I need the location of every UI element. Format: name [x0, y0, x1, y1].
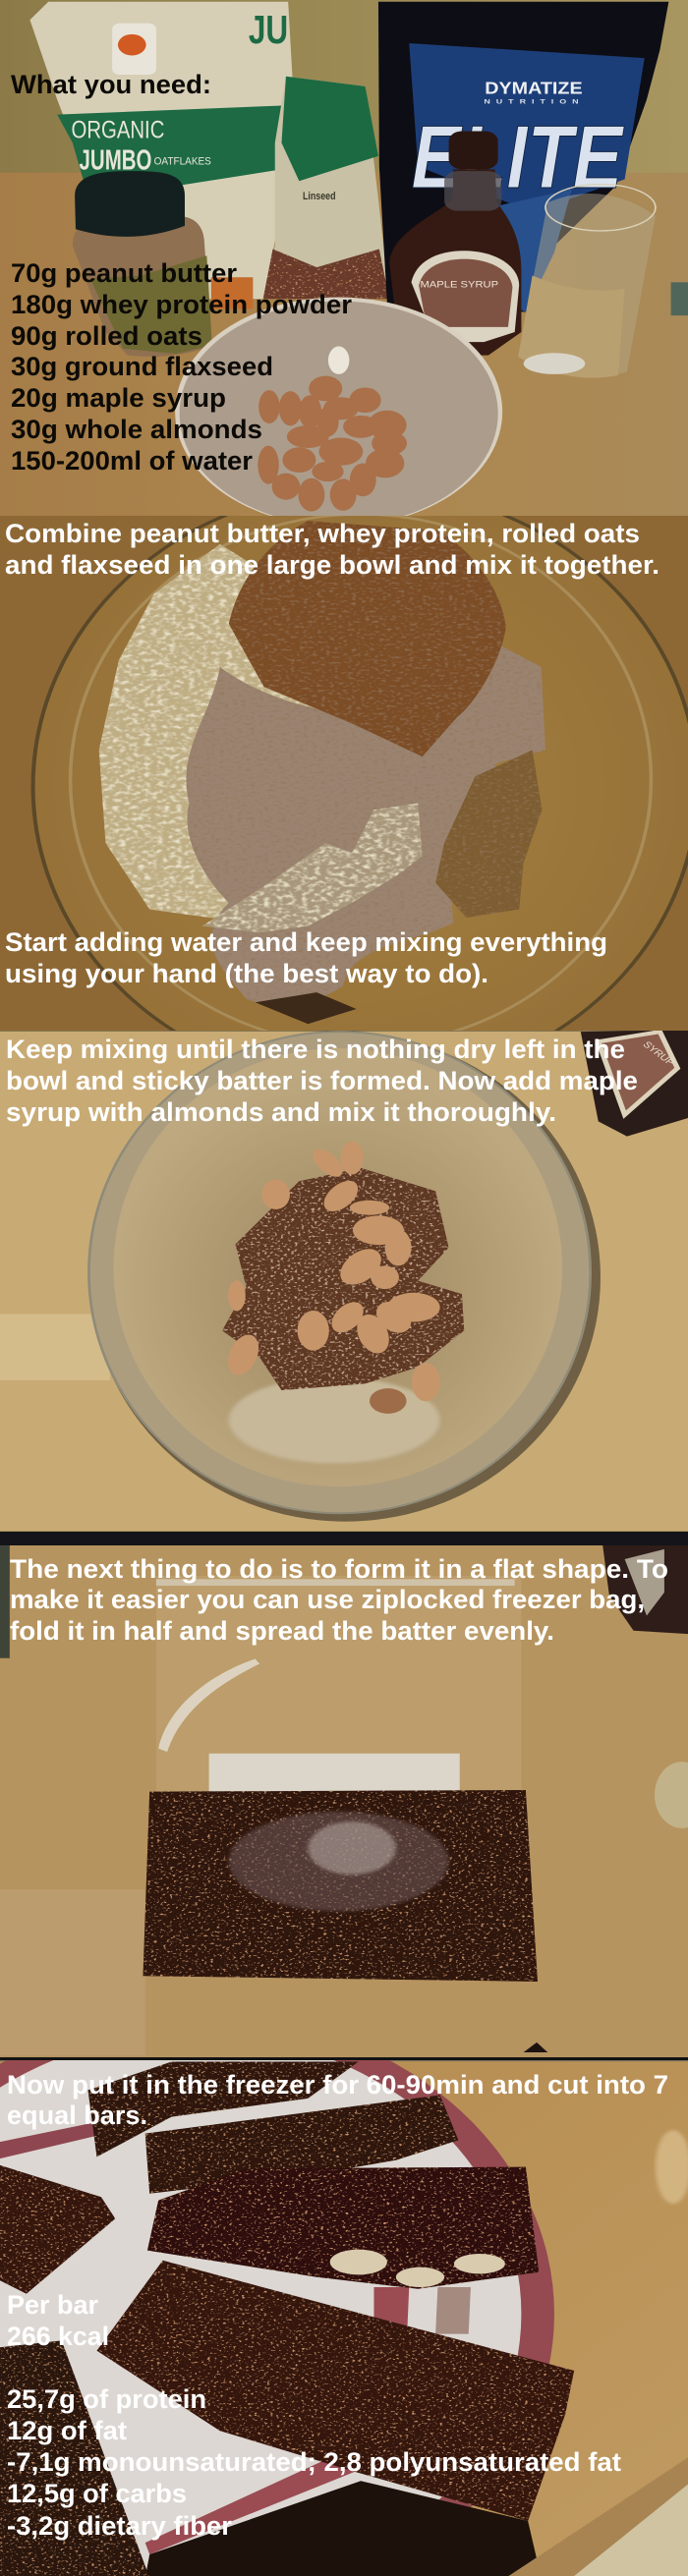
peanut butter — [435, 750, 542, 918]
text: adding water step — [5, 927, 607, 988]
whey protein powder — [186, 644, 545, 1005]
batter — [222, 1168, 464, 1390]
wood between — [506, 2457, 688, 2576]
bar: front large — [96, 2261, 574, 2521]
text: flat shape step: fold it in half and spread the batter evenly. — [10, 1616, 554, 1646]
bag brand top: JU — [249, 8, 288, 52]
plastic shine — [229, 1812, 449, 1911]
table — [0, 1022, 688, 1546]
flax seed window — [263, 250, 389, 299]
panel: combine dry ingredients — [0, 487, 688, 1086]
bag word organic: ORGANIC — [72, 116, 164, 143]
oak table — [0, 2053, 688, 2576]
ground flaxseed — [229, 521, 506, 756]
bottle barcode — [625, 1549, 664, 1615]
bowl inside — [180, 302, 498, 526]
plate corner bottom right — [572, 2485, 688, 2576]
bowl inner rim — [71, 514, 651, 1045]
wooden table — [0, 173, 688, 525]
oat patch on powder — [202, 803, 423, 932]
bowl highlight — [328, 347, 349, 374]
bottle label — [412, 251, 519, 342]
photo: protein bars on striped plate — [0, 2013, 688, 2576]
syrup bottle corner — [602, 1545, 688, 1634]
panel: flatten in freezer bag — [0, 1533, 688, 2057]
bar: lower left — [0, 2340, 149, 2576]
text: freezer step: equal bars. — [7, 2100, 147, 2130]
white card in bag — [209, 1754, 460, 1792]
bottle label text: SYRUP — [640, 1040, 676, 1068]
text: flat shape step — [10, 1554, 668, 1646]
text: keep mixing step — [6, 1035, 638, 1127]
almond bowl — [175, 298, 502, 527]
panel: sticky batter — [0, 1022, 688, 1548]
text: ingredient list: 90g rolled oats — [11, 321, 202, 351]
table — [0, 1533, 688, 2057]
ziplock bag — [156, 1576, 521, 1792]
bottle cap — [449, 132, 498, 169]
bag green band — [57, 105, 281, 186]
text: combine step — [5, 519, 659, 580]
text: freezer step — [7, 2070, 668, 2130]
glass bowl — [33, 487, 688, 1086]
bottom shadow — [145, 2481, 542, 2576]
pale lower table — [0, 1889, 145, 2055]
text: ingredient list: 30g whole almonds — [11, 415, 262, 444]
text: ingredient list: 20g maple syrup — [11, 383, 226, 413]
linseed green top — [281, 77, 378, 181]
bottle label — [599, 1032, 677, 1115]
almond slices — [330, 2250, 505, 2287]
plate — [0, 2013, 554, 2576]
text: nutrition facts — [7, 2290, 621, 2541]
text: combine step: and flaxseed in one large bowl and mix it together. — [5, 550, 659, 580]
orange packet — [211, 277, 253, 308]
bar: top back — [88, 2061, 359, 2156]
text: nutrition facts: 12,5g of carbs — [7, 2479, 187, 2508]
rolled oats — [99, 544, 440, 923]
text: nutrition facts: Per bar — [7, 2290, 98, 2320]
text: keep mixing step: bowl and sticky batter is formed. Now add maple — [6, 1066, 638, 1095]
table highlight — [656, 2130, 688, 2204]
wood background — [0, 511, 688, 1036]
rim stripes under bar — [373, 2287, 409, 2337]
text: nutrition facts: 266 kcal — [7, 2322, 109, 2351]
photo: batter and almonds in glass bowl — [0, 1022, 688, 1548]
tub brand: DYMATIZE — [485, 79, 583, 98]
photo: batter flattened in ziplock bag — [0, 1533, 688, 2057]
bar: third with almonds — [147, 2167, 539, 2289]
glass of water — [518, 185, 656, 378]
bag shine — [158, 1658, 259, 1752]
rim stripe upper left — [0, 2108, 163, 2158]
text: nutrition facts: -7,1g monounsaturated; 2,8 polyunsaturated fat — [7, 2447, 621, 2477]
wall background — [0, 0, 688, 176]
almonds on batter — [223, 1142, 440, 1414]
text: ingredient list — [11, 258, 352, 476]
round object at edge — [655, 1762, 688, 1828]
panel: what you need — [0, 0, 688, 527]
bowl inner — [113, 1048, 562, 1486]
bag word oatflakes: OATFLAKES — [154, 155, 211, 167]
pale residue — [229, 1377, 440, 1464]
text: what you need heading: What you need: — [11, 70, 211, 99]
glass bowl — [88, 1032, 591, 1513]
bag word jumbo: JUMBO — [80, 145, 151, 176]
linseed bag — [263, 77, 389, 299]
peanut butter jar — [73, 171, 212, 357]
text: combine step: Combine peanut butter, whey protein, rolled oats — [5, 519, 640, 548]
photo: glass bowl with dry ingredients — [0, 487, 688, 1086]
left dark edge — [0, 1545, 10, 1658]
text: nutrition facts: -3,2g dietary fiber — [7, 2511, 232, 2541]
label text: MAPLE SYRUP — [420, 281, 498, 290]
flattened batter — [143, 1790, 538, 1982]
text: flat shape step: The next thing to do is to form it in a flat shape. To — [10, 1554, 668, 1584]
bottom dark strip — [0, 1532, 688, 1548]
text: adding water step: using your hand (the best way to do). — [5, 959, 488, 988]
zip seal — [156, 1579, 515, 1586]
bottle neck glass — [444, 171, 501, 211]
protein tub — [378, 2, 668, 312]
text: ingredient list: 180g whey protein powder — [11, 290, 352, 319]
text: freezer step: Now put it in the freezer for 60-90min and cut into 7 — [7, 2070, 668, 2100]
panel: finished bars — [0, 2013, 688, 2576]
green object at edge — [671, 282, 688, 315]
syrup bottle corner — [581, 1030, 688, 1137]
linseed label: Linseed — [303, 190, 336, 201]
glass base highlight — [524, 353, 585, 374]
text: ingredient list: 150-200ml of water — [11, 446, 253, 476]
text: keep mixing step: Keep mixing until there is nothing dry left in the — [6, 1035, 625, 1064]
photo: ingredients on a table — [0, 0, 688, 527]
text: ingredient list: 30g ground flaxseed — [11, 352, 273, 381]
dark top edge — [0, 1533, 688, 1545]
plate lower rim — [145, 2447, 366, 2554]
shadow under mound — [256, 992, 357, 1024]
glass rim — [545, 185, 656, 231]
bar: second — [145, 2095, 458, 2194]
maple syrup bottle — [389, 132, 521, 356]
owl mark — [118, 34, 146, 55]
text: nutrition facts: 12g of fat — [7, 2416, 127, 2445]
text: flat shape step: make it easier you can use ziplocked freezer bag, — [10, 1585, 645, 1614]
jar label — [90, 255, 212, 354]
oat flakes bag — [29, 2, 293, 299]
plate white inside — [0, 2034, 521, 2576]
bag logo — [112, 24, 156, 75]
tub lower label — [497, 190, 572, 312]
text: keep mixing step: syrup with almonds and mix it thoroughly. — [6, 1097, 556, 1127]
bar: left — [0, 2165, 115, 2294]
lighter table strip — [0, 1314, 110, 1380]
dark object at bottom — [524, 2043, 547, 2052]
text: nutrition facts: 25,7g of protein — [7, 2384, 206, 2414]
bright shine — [308, 1821, 396, 1875]
almonds — [258, 376, 407, 512]
text: adding water step: Start adding water and keep mixing everything — [5, 927, 607, 957]
water — [518, 276, 625, 378]
text: ingredient list: 70g peanut butter — [11, 258, 237, 288]
jar lid — [75, 171, 185, 237]
top dark edge — [0, 1022, 688, 1031]
top edge — [0, 2053, 688, 2061]
tub blue label — [409, 43, 645, 212]
bowl shadow — [90, 1034, 601, 1522]
tub subbrand: NUTRITION — [484, 97, 579, 105]
label panel — [419, 259, 512, 327]
